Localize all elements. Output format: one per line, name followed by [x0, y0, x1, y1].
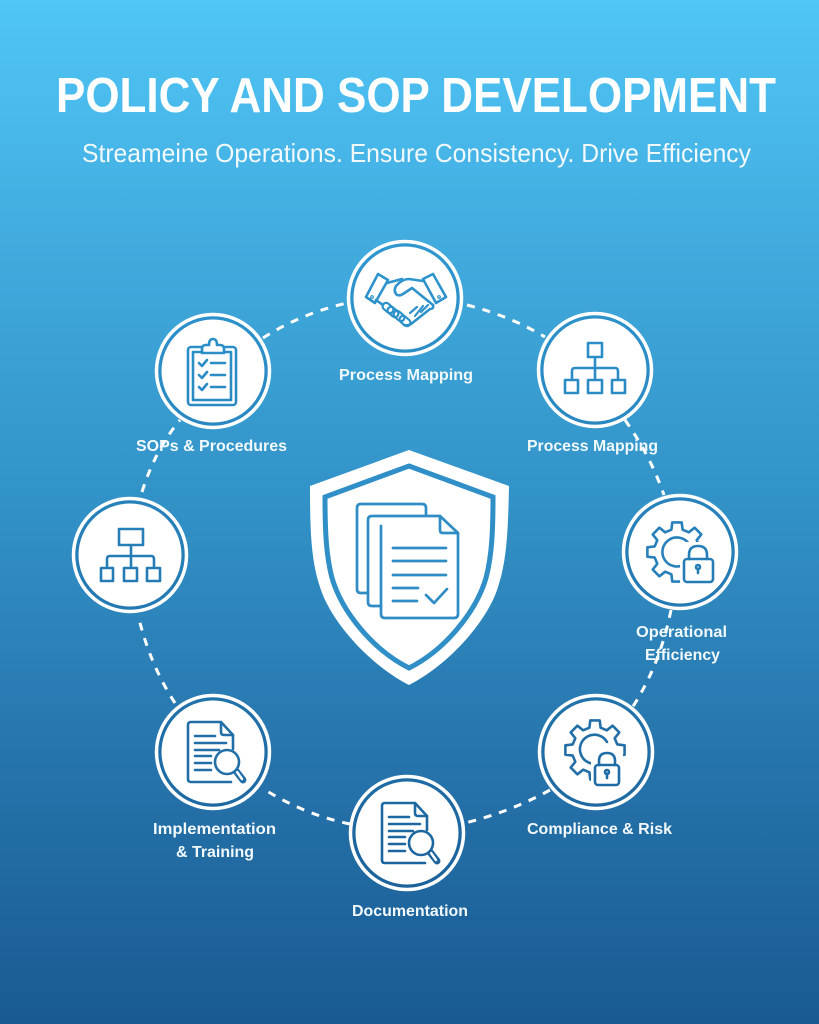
icon: handshake [366, 274, 446, 328]
label: process mapping top: Process Mapping [339, 367, 473, 384]
label: implementation and training: Implementation [153, 821, 276, 838]
label: compliance and risk: Compliance & Risk [527, 821, 672, 838]
label: operational efficiency: Efficiency [645, 647, 720, 664]
icon: document stack [357, 504, 458, 618]
icon: org chart [101, 529, 160, 581]
icon: gear with lock [565, 720, 625, 789]
node: upper left clipboard [156, 314, 270, 428]
icon: clipboard checklist [188, 339, 236, 405]
dashed connector ring [138, 303, 671, 824]
label: implementation and training [153, 821, 276, 861]
icon: document with magnifier [188, 722, 243, 782]
node: top handshake [348, 242, 462, 354]
node: bottom document search [350, 776, 464, 890]
subtitle: Streameine Operations. Ensure Consistency. Drive Efficiency [82, 138, 751, 168]
label: implementation and training: & Training [176, 844, 254, 861]
shield outer [310, 450, 509, 685]
node: lower right gear and lock [540, 696, 652, 808]
central shield with documents [310, 450, 509, 685]
icon: gear with lock [647, 522, 718, 586]
label: process mapping right: Process Mapping [527, 438, 658, 455]
shield inner ring [325, 466, 493, 668]
node: upper right org chart [538, 314, 652, 426]
node: right gear and lock [624, 496, 736, 608]
node: left org chart [74, 498, 186, 612]
label: sops and procedures: SOPs & Procedures [136, 438, 287, 455]
label: documentation: Documentation [352, 903, 468, 920]
label: operational efficiency: Operational [636, 624, 727, 641]
icon: document with magnifier [382, 803, 437, 863]
node: lower left document search [156, 696, 270, 808]
icon: org chart [565, 343, 625, 393]
label: operational efficiency [636, 624, 727, 664]
